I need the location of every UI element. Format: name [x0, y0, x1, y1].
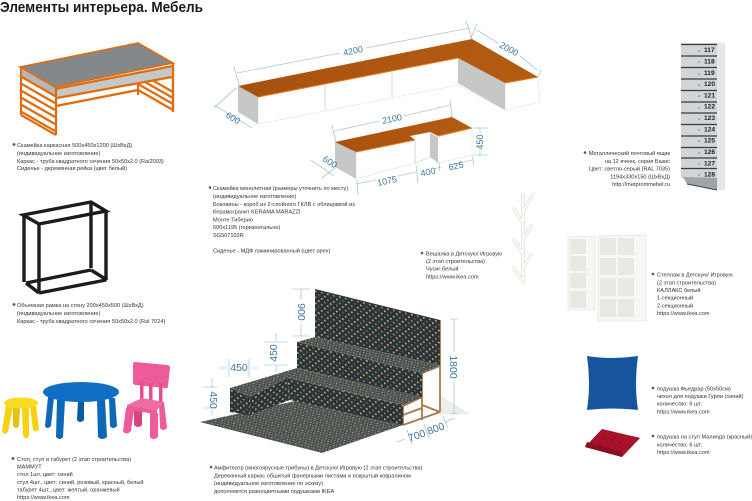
blue table: [43, 382, 119, 439]
text: blue pillow: чехол для подушки Гурли (синий): [657, 393, 744, 400]
mailbox numbers: 123: [704, 115, 715, 122]
furniture: black wall frame: [23, 202, 107, 293]
text: coat rack: Вешалка в Детскую/ Игровую: [426, 252, 502, 258]
text: amphitheatre: дополняется разноцветными подушками IKEA: [214, 489, 335, 495]
text: kallax: 2-секционный: [657, 302, 693, 310]
mailbox numbers: 119: [704, 70, 715, 77]
riser 2: [297, 342, 422, 397]
text: kids furniture: стол 1шт, цвет: синий: [17, 471, 73, 478]
text: red cushion: подушка на стул Малинда (красный): [657, 434, 752, 440]
furniture: amphitheatre: [200, 289, 470, 453]
mailbox numbers: 117: [704, 47, 715, 54]
text: blue pillow: [652, 386, 744, 416]
text: blue pillow: количество: 6 шт.: [657, 402, 702, 408]
dimensions: small bench: 1075: [376, 174, 398, 188]
dimensions: small bench: 400: [420, 166, 436, 178]
mailbox numbers: 125: [704, 138, 715, 144]
text: monolithic bench: Боковины - короб из 2-слойного ГКЛВ с облицовкой из: [213, 201, 355, 208]
dimensions: amphitheatre: 450: [268, 344, 280, 362]
furniture: small monolithic bench: [335, 117, 472, 179]
text: amphitheatre: Амфитеатр (многоярусные трибуны) в Детскую/ Игровую (2 этап строительства): [214, 466, 423, 472]
furniture: large monolithic bench: [238, 39, 540, 124]
mailbox numbers: 118: [704, 58, 715, 66]
text: kallax: 1-секционный: [657, 294, 693, 302]
text: coat rack: [421, 252, 502, 280]
text: coat rack: https://www.ikea.com: [426, 274, 479, 280]
text: frame bench: (индивидуальное изготовление): [17, 151, 100, 157]
text: frame bench: Сиденье - деревянная рейка (цвет белый): [17, 165, 127, 172]
mailbox numbers: 127: [704, 160, 715, 168]
step tops: [297, 337, 440, 373]
dimensions: small bench: 2100: [381, 112, 403, 126]
text: kids furniture: Стол, стул и табурет (2 этап строительства): [17, 457, 131, 463]
text: kids furniture: https://www.ikea.com: [17, 495, 70, 501]
text: monolithic bench: [209, 185, 355, 254]
text: mailbox: Металлический почтовый ящик: [589, 150, 671, 157]
floor carpet: [200, 400, 403, 453]
text: mailbox: http://metprommebel.ru: [612, 182, 670, 188]
text: frame bench: Скамейка каркасная 500х450х1200 (ШхВхД): [17, 142, 132, 149]
mailbox numbers: 122: [704, 104, 715, 110]
text: monolithic bench: Керамогранит KERAMA MARAZZI: [213, 210, 301, 216]
yellow stool: [2, 398, 39, 438]
text: monolithic bench: Сиденье - МДФ ламинированный (цвет орех): [213, 248, 330, 254]
dimensions: large bench: 2000: [498, 40, 520, 58]
text: red cushion: [652, 434, 752, 456]
dimensions: small bench: [311, 100, 488, 195]
text: kallax: (2 этап строительства): [657, 280, 716, 286]
text: monolithic bench: Скамейка монолитная (размеры уточнить по месту): [213, 185, 348, 192]
dimensions: amphitheatre: 800: [426, 420, 446, 438]
text: wall frame: Каркас - труба квадратного сечения 50х50х2.0 (Ral 7024): [17, 319, 165, 325]
text: amphitheatre: (индивидуальное изготовление по эскизу): [214, 481, 323, 487]
text: kids furniture: [12, 457, 143, 501]
text: amphitheatre: [210, 466, 423, 495]
dimensions: amphitheatre: 450: [207, 391, 219, 409]
text: blue pillow: подушка Фьедрар (50х50см): [657, 386, 731, 392]
dimensions: amphitheatre: 700: [407, 427, 427, 445]
dimensions: amphitheatre: 1800: [447, 355, 459, 379]
dimensions: small bench: 450: [475, 134, 485, 150]
mailbox numbers: 126: [704, 149, 715, 156]
mailbox numbers: 128: [704, 172, 715, 178]
wood frame: [403, 320, 440, 425]
furniture: kids table, chair and stool: [2, 362, 170, 439]
dimensions: amphitheatre: 900: [295, 303, 307, 321]
mailbox numbers: [704, 47, 715, 178]
text: coat rack: Чусиг белый: [426, 266, 458, 272]
text: kallax: https://www.ikea.com: [657, 311, 710, 317]
text: amphitheatre: Деревянный каркас обшитый фанерными листами и покрытый ковралином: [214, 472, 411, 480]
furniture: red seat cushion: [585, 429, 640, 457]
text: kids furniture: табурет 4шт., цвет: желтый, оранжевый: [17, 486, 120, 494]
text: mailbox: 1194х330х150 (ШхВхД): [610, 174, 670, 180]
mailbox numbers: 124: [704, 126, 715, 134]
text: red cushion: количество: 6 шт.: [657, 442, 702, 448]
furniture: frame bench: [20, 43, 173, 135]
furniture: metal mailbox: [681, 43, 725, 190]
text: frame bench: [13, 142, 164, 172]
dimensions: large bench: 600: [224, 110, 242, 126]
text: coat rack: (2 этап строительства): [426, 259, 485, 265]
text: mailbox: [584, 150, 671, 188]
back wall: [315, 289, 440, 365]
text: mailbox: на 12 ячеек, серия Базис: [605, 159, 670, 165]
text: blue pillow: https://www.ikea.com: [657, 410, 710, 416]
furniture: kallax shelves: [568, 235, 646, 321]
dimensions: large bench: [214, 21, 541, 128]
text: kids furniture: стул 4шт., цвет: синий, розовый, красный, белый: [17, 479, 143, 486]
pink chair: [123, 362, 170, 439]
text: monolithic bench: SG507102R: [213, 233, 244, 239]
text: wall frame: Объемная рамка на стену 200х450х500 (ШхВхД): [17, 303, 144, 309]
text: wall frame: [13, 303, 165, 325]
riser 1: [287, 378, 403, 425]
dimensions: small bench: 625: [448, 160, 464, 172]
text: kids furniture: МАММУТ: [17, 464, 42, 470]
text: kallax: КАЛЛАКС белый: [657, 287, 700, 294]
furniture: blue pillow: [587, 356, 638, 410]
mailbox numbers: 121: [704, 92, 715, 100]
dimensions: amphitheatre: [203, 289, 459, 445]
text: kallax: Стеллаж в Детскую/ Игровую: [657, 272, 733, 278]
text: monolithic bench: (индивидуальное изготовление): [213, 194, 296, 200]
text: monolithic bench: Монте Тиберио: [213, 218, 253, 224]
text: frame bench: Каркас - труба квадратного сечения 50х50х2.0 (Rai2003): [17, 159, 164, 165]
text: kallax: [652, 272, 733, 317]
dimensions: large bench: 4200: [342, 44, 364, 58]
mailbox numbers: 120: [704, 81, 715, 88]
dimensions: amphitheatre: 450: [230, 362, 248, 374]
text: monolithic bench: 600х1195 (горизонтально): [213, 225, 281, 231]
dimensions: small bench: 600: [321, 154, 339, 170]
text: red cushion: https://www.ikea.com: [657, 450, 710, 456]
text: wall frame: (индивидуальное изготовление): [17, 311, 100, 317]
furniture: tree coat rack: [514, 195, 532, 283]
text: mailbox: Цвет: светло-серый (RAL 7035): [589, 166, 670, 172]
